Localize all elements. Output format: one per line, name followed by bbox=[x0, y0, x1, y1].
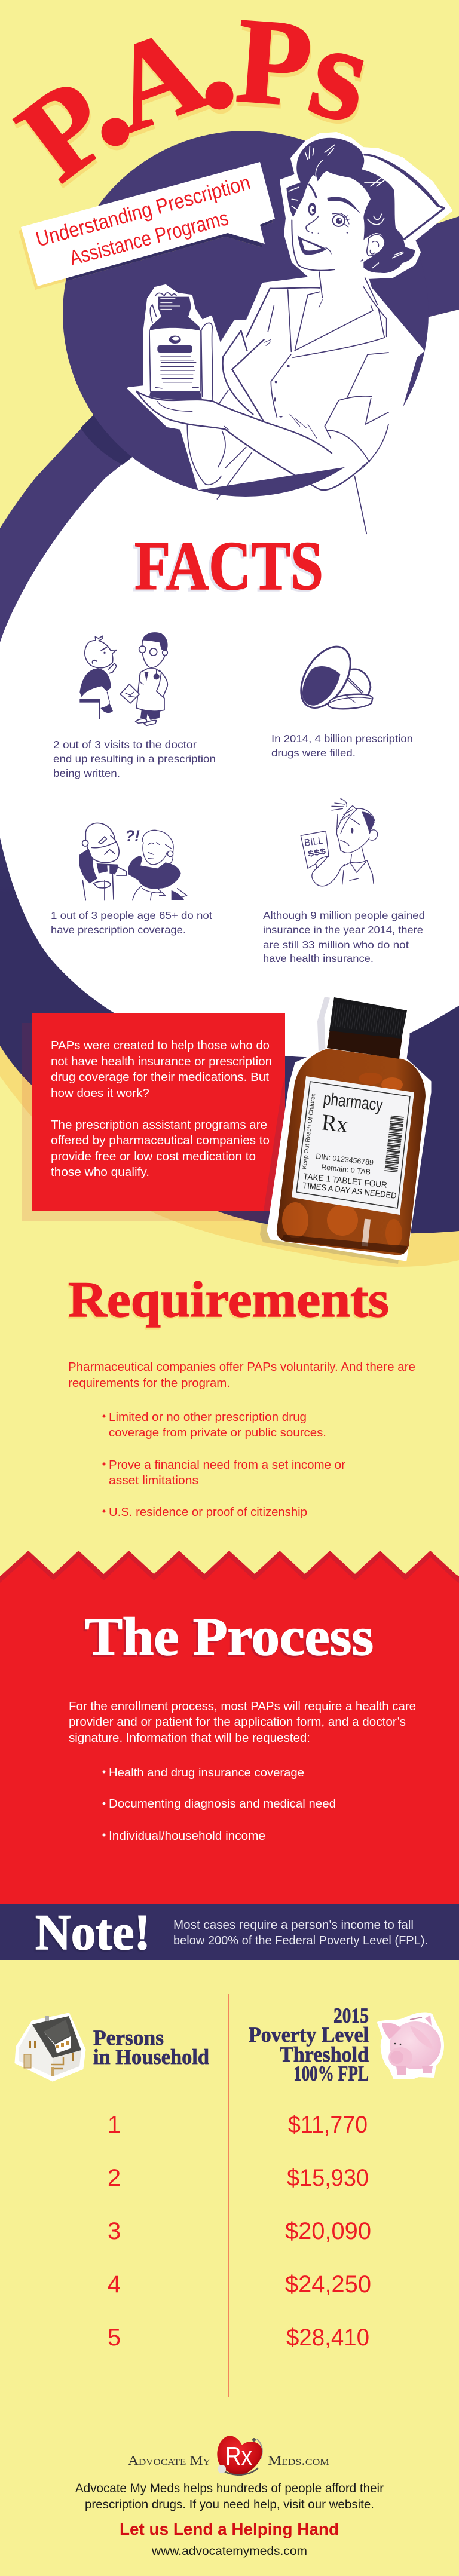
panel: what PAPs are: drug coverage for their medications. But bbox=[51, 1070, 269, 1084]
bottle label: Remain: 0 TAB bbox=[321, 1163, 371, 1177]
panel: what PAPs are bbox=[32, 1013, 285, 1211]
bottle label bbox=[292, 1076, 414, 1215]
heading: persons in household: Persons bbox=[93, 2026, 164, 2050]
text: note body bbox=[173, 1918, 428, 1947]
list: requirements bullets: Prove a financial need from a set income or bbox=[109, 1458, 345, 1472]
text: footer description: Advocate My Meds helps hundreds of people afford their bbox=[75, 2482, 384, 2495]
bottle sticker shadow bbox=[260, 997, 423, 1264]
text: website url: www.advocatemymeds.com bbox=[151, 2544, 307, 2558]
panel: note band bbox=[0, 1904, 459, 1961]
icon: elderly couple: ?! bbox=[125, 826, 140, 844]
panel: what PAPs are: provide free or low cost medication to bbox=[51, 1150, 256, 1163]
heading: poverty level threshold: Threshold bbox=[280, 2042, 369, 2066]
text: process intro: signature. Information that will be requested: bbox=[69, 1731, 310, 1745]
callout: speech banner: Understanding Prescription bbox=[33, 171, 253, 252]
text: footer description bbox=[75, 2482, 384, 2511]
list: process bullets: Individual/household income bbox=[109, 1829, 265, 1843]
text: requirements intro bbox=[68, 1360, 415, 1390]
shape: red panel shadow bbox=[22, 1023, 276, 1221]
panel: process section bbox=[0, 1557, 459, 1904]
text: requirements intro: Pharmaceutical companies offer PAPs voluntarily. And there are bbox=[68, 1360, 415, 1374]
panel: what PAPs are: The prescription assistant programs are bbox=[51, 1118, 267, 1132]
bottle label: pharmacy bbox=[322, 1089, 384, 1115]
list: requirements bullets: U.S. residence or proof of citizenship bbox=[109, 1505, 307, 1519]
table: persons column: 2 bbox=[108, 2165, 121, 2191]
heading: poverty level threshold: 2015 bbox=[333, 2004, 369, 2027]
title: P.A.Ps arched letters: . bbox=[95, 0, 136, 178]
heading: persons in household: in Household bbox=[93, 2045, 209, 2069]
bottle label: TIMES A DAY AS NEEDED bbox=[302, 1180, 397, 1200]
heading: poverty level threshold bbox=[249, 2004, 369, 2085]
heading: FACTS: FACTS bbox=[134, 528, 323, 605]
table: persons column: 3 bbox=[108, 2218, 121, 2244]
table: persons column: 1 bbox=[108, 2112, 121, 2138]
panel: navy diagonal band bbox=[299, 216, 459, 370]
bottle label: DIN: 0123456789 bbox=[316, 1152, 374, 1167]
panel: what PAPs are: those who qualify. bbox=[51, 1165, 149, 1179]
text: fact 2 bbox=[271, 733, 413, 759]
table: persons column: 5 bbox=[108, 2324, 121, 2351]
bottle cap bbox=[329, 997, 407, 1039]
callout: speech banner: Assistance Programs bbox=[67, 206, 231, 270]
table divider line bbox=[228, 1994, 229, 2397]
table: persons column: 4 bbox=[108, 2271, 121, 2298]
bottle sticker outline bbox=[268, 993, 430, 1260]
text: process intro bbox=[69, 1699, 416, 1745]
logo: Advocate My Meds: Meds.com bbox=[268, 2453, 329, 2468]
text: fact 1: 2 out of 3 visits to the doctor bbox=[53, 739, 197, 751]
text: fact 4: are still 33 million who do not bbox=[263, 939, 409, 951]
panel: what PAPs are: offered by pharmaceutical companies to bbox=[51, 1134, 270, 1147]
heading: poverty level threshold: 100% FPL bbox=[293, 2062, 369, 2085]
callout: speech banner bbox=[19, 162, 275, 290]
list: requirements bullets: Limited or no other prescription drug bbox=[109, 1410, 307, 1424]
bottle glass bbox=[277, 1049, 426, 1255]
panel: what PAPs are: how does it work? bbox=[51, 1086, 149, 1100]
icon: man reading a bill bbox=[301, 799, 378, 886]
bottle label: Rx bbox=[320, 1110, 350, 1138]
bottle label: TAKE 1 TABLET FOUR bbox=[303, 1171, 388, 1190]
list: process bullets: Documenting diagnosis and medical need bbox=[109, 1797, 336, 1811]
list: process bullets: Health and drug insurance coverage bbox=[109, 1766, 304, 1779]
text: fact 2: drugs were filled. bbox=[271, 747, 356, 759]
table: persons column bbox=[108, 2112, 121, 2351]
text: call to action: Let us Lend a Helping Hand bbox=[120, 2520, 339, 2538]
text: process intro: For the enrollment process, most PAPs will require a health care bbox=[69, 1699, 416, 1713]
list: requirements bullets: coverage from private or public sources. bbox=[109, 1426, 326, 1439]
icon: house bbox=[16, 2014, 85, 2081]
table: threshold column: $20,090 bbox=[285, 2218, 371, 2244]
table: threshold column bbox=[285, 2112, 371, 2351]
title: P.A.Ps arched letters: A bbox=[92, 1, 221, 158]
list: requirements bullets bbox=[103, 1410, 345, 1519]
text: fact 2: In 2014, 4 billion prescription bbox=[271, 733, 413, 745]
logo: Advocate My Meds bbox=[128, 2436, 329, 2476]
icon: man reading a bill: $$$ bbox=[307, 846, 326, 859]
icon: piggy bank bbox=[378, 2014, 443, 2078]
panel: amber swoosh shadow bbox=[0, 1016, 459, 1267]
bottle label: Keep Out Reach Of Children bbox=[301, 1093, 317, 1169]
heading: poverty level threshold: Poverty Level bbox=[249, 2023, 369, 2047]
text: fact 3: have prescription coverage. bbox=[51, 924, 186, 936]
text: fact 3 bbox=[51, 909, 212, 936]
shape: circle shadow crescent bbox=[81, 415, 143, 465]
heading: Requirements: Requirements bbox=[68, 1272, 389, 1328]
text: process intro: provider and or patient for the application form, and a doctor’s bbox=[69, 1715, 406, 1729]
text: fact 4 bbox=[263, 909, 425, 964]
text: requirements intro: requirements for the program. bbox=[68, 1376, 230, 1390]
text: footer description: prescription drugs. If you need help, visit our website. bbox=[85, 2498, 374, 2511]
title: P.A.Ps arched letters bbox=[0, 0, 384, 206]
shape: navy circle behind nurse bbox=[63, 131, 429, 497]
icon: man reading a bill: BILL bbox=[304, 835, 324, 849]
heading: Note!: Note! bbox=[35, 1904, 151, 1961]
table: threshold column: $15,930 bbox=[287, 2165, 369, 2191]
logo: Advocate My Meds: Rx bbox=[225, 2442, 252, 2471]
table: threshold column: $28,410 bbox=[286, 2324, 369, 2351]
heading: The Process: The Process bbox=[85, 1607, 374, 1667]
nurse uniform and arm lines bbox=[136, 287, 388, 534]
panel: what PAPs are: not have health insurance or prescription bbox=[51, 1055, 272, 1068]
heading: persons in household bbox=[93, 2026, 209, 2069]
list: process bullets bbox=[103, 1766, 336, 1843]
text: note body: below 200% of the Federal Poverty Level (FPL). bbox=[173, 1934, 428, 1947]
icon: patient and doctor bbox=[79, 632, 168, 725]
table: threshold column: $11,770 bbox=[288, 2112, 368, 2138]
text: fact 1: being written. bbox=[53, 767, 120, 779]
text: fact 4: Although 9 million people gained bbox=[263, 909, 425, 921]
text: fact 3: 1 out of 3 people age 65+ do not bbox=[51, 909, 212, 921]
text: fact 1 bbox=[53, 739, 216, 779]
icon: split pill bbox=[291, 638, 372, 716]
panel: navy swoosh background bbox=[0, 388, 459, 1233]
icon: elderly couple bbox=[79, 823, 187, 900]
logo: Advocate My Meds: Advocate My bbox=[128, 2453, 210, 2468]
text: note body: Most cases require a person’s income to fall bbox=[173, 1918, 414, 1932]
nurse white sticker outline bbox=[128, 133, 451, 489]
illustration: nurse holding bottle bbox=[128, 133, 451, 534]
illustration: amber pharmacy bottle bbox=[260, 993, 430, 1264]
table: threshold column: $24,250 bbox=[285, 2271, 371, 2298]
nurse head bbox=[286, 138, 444, 305]
text: fact 4: have health insurance. bbox=[263, 952, 374, 964]
list: requirements bullets: asset limitations bbox=[109, 1474, 198, 1487]
panel: white central blob bbox=[0, 310, 459, 1057]
shape: zigzag edge shadow bbox=[0, 1551, 459, 1613]
bottle neck bbox=[327, 1029, 402, 1059]
text: fact 4: insurance in the year 2014, there bbox=[263, 924, 423, 936]
text: fact 1: end up resulting in a prescription bbox=[53, 753, 216, 765]
panel: what PAPs are: PAPs were created to help those who do bbox=[51, 1039, 270, 1052]
